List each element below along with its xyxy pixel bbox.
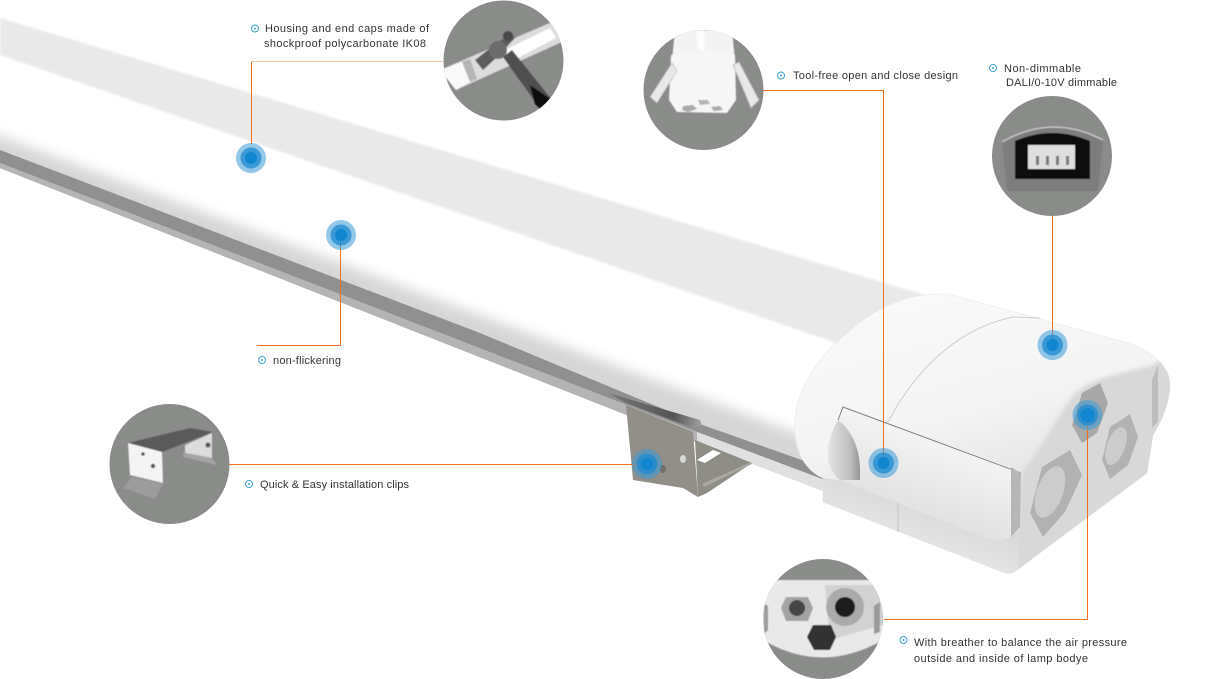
hotspot: dimming [1038,330,1068,360]
label: dimming [990,63,1117,89]
label: clips: Quick & Easy installation clips [260,479,410,491]
front panel [838,407,1020,541]
large gland hex [1029,450,1082,537]
label: breather [900,636,1127,665]
right gland hex [1101,414,1138,479]
leader line: housing [251,62,443,144]
mounting bracket [608,393,752,497]
label: housing [252,23,430,50]
hotspot: breather [1072,400,1102,430]
label: dimming: DALI/0-10V dimmable [1006,77,1117,89]
label: breather: With breather to balance the air pressure [914,637,1127,649]
label: housing: Housing and end caps made of [265,23,430,35]
label: non-flickering: non-flickering [273,355,341,367]
panel recess [828,420,860,480]
lamp tube body [0,18,935,520]
hotspot: non-flickering [326,220,356,250]
circle inset: hammer impact test [440,0,564,120]
leader line: breather [884,415,1088,620]
leader line: dimming [1052,216,1054,345]
label: housing: shockproof polycarbonate IK08 [264,38,426,50]
side slot [1152,365,1158,428]
hotspot: housing [236,143,266,173]
circle inset: cable glands and breather [763,559,883,679]
circle inset: installation clip [110,404,230,524]
label: tool-free: Tool-free open and close design [793,70,958,82]
leader line: tool-free [763,90,884,463]
top gland hex [1072,383,1108,443]
circle inset: tool-free opening [644,30,764,150]
label: breather: outside and inside of lamp bodye [914,653,1088,665]
hotspot: clips [632,449,662,479]
hotspot: tool-free [868,448,898,478]
cap seam [888,317,1040,422]
end cap housing [795,294,1190,590]
leader line: non-flickering [257,235,340,346]
label: dimming: Non-dimmable [1004,63,1081,75]
end face [1014,360,1170,569]
base tray [823,478,1020,574]
leader line: clips [229,464,648,466]
circle inset: terminal block [992,96,1112,216]
panel side edge [1011,467,1021,537]
